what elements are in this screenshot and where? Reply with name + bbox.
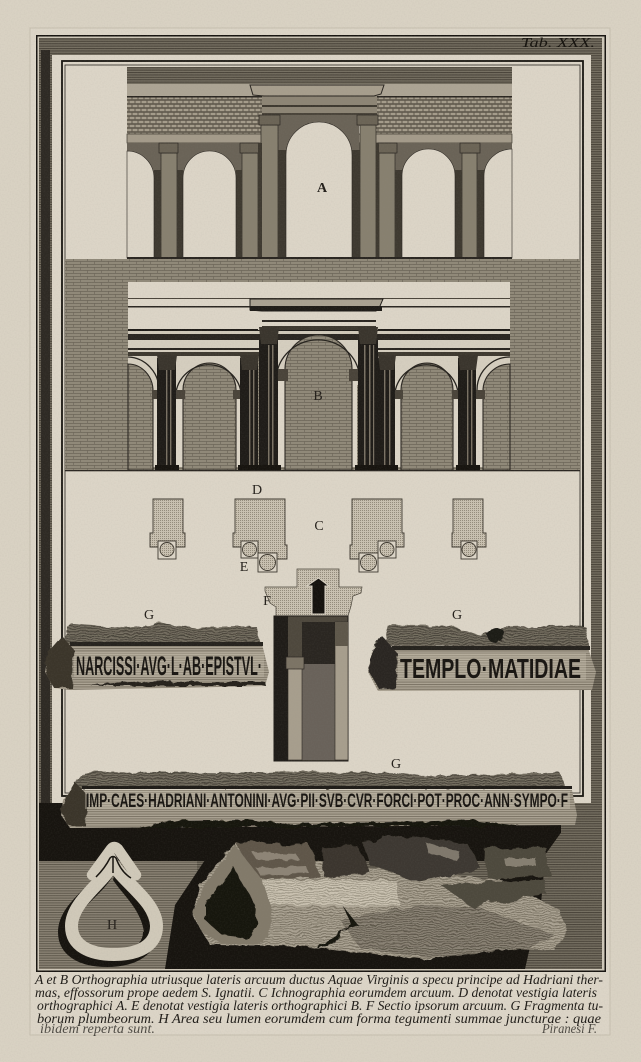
pipe end xyxy=(369,636,398,690)
plan pier 4 xyxy=(452,499,486,559)
letter F: F xyxy=(263,594,271,609)
arch openings xyxy=(127,122,512,258)
pipe body xyxy=(368,648,596,691)
ground line xyxy=(65,470,580,471)
inner shadow xyxy=(113,872,151,946)
upper wall band xyxy=(127,67,512,84)
dark lower band xyxy=(39,803,602,969)
pipe top shadow xyxy=(392,646,590,650)
inner light panel xyxy=(52,55,591,803)
letter B: B xyxy=(313,389,323,404)
pipe body xyxy=(45,644,269,690)
plate number: Tab. XXX. xyxy=(521,36,595,51)
columns xyxy=(155,327,480,470)
caption line 2: mas, effossorum prope aedem S. Ignatii. C Ichnographia eorumdem arcuum. D denotat vestigia lateris xyxy=(35,985,597,1000)
brick courses xyxy=(127,96,512,134)
pipe light band xyxy=(258,880,400,906)
pipe top slab xyxy=(60,623,262,644)
pipe body xyxy=(61,790,577,828)
panel: ground plan C xyxy=(150,483,486,575)
light jamb strips xyxy=(153,370,483,467)
upper plain wall xyxy=(128,282,510,330)
letter G right: G xyxy=(452,608,462,623)
pipe fragment: long inscription G xyxy=(61,771,577,828)
pipe top slab xyxy=(72,771,566,788)
pipe end xyxy=(61,782,88,826)
pipe body xyxy=(192,843,567,960)
lumen ring xyxy=(72,864,156,954)
pipe end xyxy=(45,636,74,688)
letter D: D xyxy=(252,483,262,498)
engraved frame xyxy=(36,35,606,972)
impost band xyxy=(127,134,512,143)
pier capitals xyxy=(159,115,480,153)
piers xyxy=(161,125,477,258)
letter C: C xyxy=(314,519,324,534)
caption line 4: borum plumbeorum. H Area seu lumen eorumdem cum forma tegumenti summae juncturae : quae xyxy=(37,1011,601,1026)
entablature xyxy=(128,329,510,356)
centre attic xyxy=(250,299,383,330)
panel: elevation B xyxy=(65,259,580,471)
arch openings xyxy=(128,335,510,470)
plan pier 1 xyxy=(150,499,185,559)
caption line 5: ibidem reperta sunt. xyxy=(40,1021,155,1036)
ground line xyxy=(127,257,512,259)
pipe fragment: Templo Matidiae xyxy=(368,625,596,691)
panel: section F xyxy=(263,569,362,761)
pipe lower shading xyxy=(340,905,555,958)
caption xyxy=(34,972,604,1036)
panel: elevation A xyxy=(127,67,512,259)
imposts xyxy=(152,369,485,399)
letter E: E xyxy=(240,560,248,575)
letter G left: G xyxy=(144,608,154,623)
signature: Piranesi F. xyxy=(541,1021,597,1036)
inscription band xyxy=(398,653,586,680)
centre arch surround xyxy=(278,115,359,258)
spandrels xyxy=(128,340,510,396)
column capitals xyxy=(157,327,478,370)
column bases xyxy=(155,465,480,470)
pipe underside xyxy=(90,680,266,686)
shaded jambs xyxy=(154,143,484,258)
plan pier 3 xyxy=(350,499,404,572)
plan pier 2 xyxy=(233,499,287,572)
pipe top shadow xyxy=(70,642,263,646)
large pipe fragment xyxy=(192,834,567,960)
section body xyxy=(274,616,348,761)
pipe top fragments xyxy=(235,834,550,905)
archivolts xyxy=(128,340,510,392)
ring shadow xyxy=(65,872,150,960)
pipe top slab xyxy=(382,625,590,648)
engraved plate illustration: NARCISSI·AVG·L·AB·EPISTVL· xyxy=(76,651,262,681)
centre attic xyxy=(250,85,384,126)
pipe crack xyxy=(316,905,358,948)
arcade wall xyxy=(127,143,512,258)
pipe fragment: Narcissi xyxy=(45,623,269,690)
lumen fill xyxy=(72,866,157,954)
pipe end opening xyxy=(192,845,272,945)
pipe top shadow xyxy=(82,786,572,789)
section H: lumen of the pipe xyxy=(65,847,157,960)
inscription band xyxy=(85,791,570,809)
caption line 3: orthographici A. E denotat vestigia lateris orthographici B. F Sectio ipsorum arcuum. G Fragmenta tu- xyxy=(37,998,604,1013)
letter H: H xyxy=(107,918,117,933)
pipe bore xyxy=(205,866,258,938)
letter A: A xyxy=(317,181,328,196)
column flutes xyxy=(166,345,472,465)
brick ground xyxy=(65,259,580,471)
pipe underside xyxy=(130,820,520,828)
channel slot xyxy=(307,578,329,614)
column shafts xyxy=(157,340,476,468)
inscription band xyxy=(74,652,264,677)
pipe top highlights xyxy=(252,842,536,875)
section head xyxy=(265,569,362,616)
joint cap xyxy=(92,847,136,875)
pipe bark mark xyxy=(487,627,505,643)
letter G centre: G xyxy=(391,757,401,772)
joint seam xyxy=(96,856,131,878)
caption line 1: A et B Orthographia utriusque lateris arcuum ductus Aquae Virginis a specu principe ad Hadriani ther- xyxy=(34,972,603,987)
